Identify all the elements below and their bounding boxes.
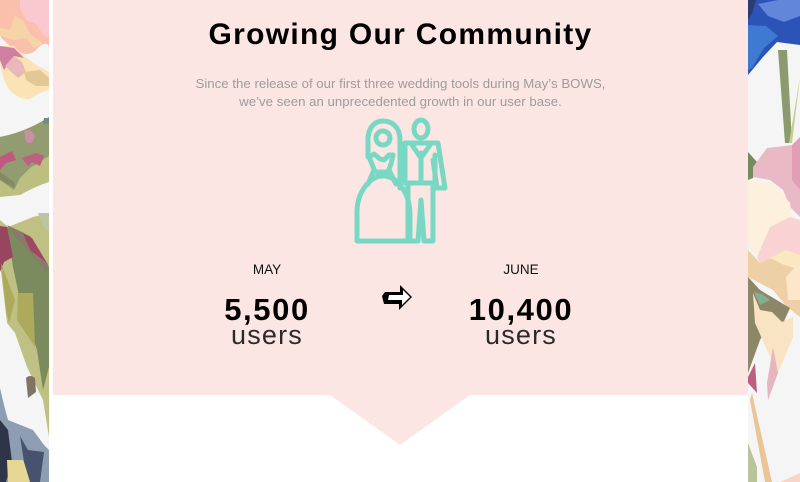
May value: 5,500 [224,292,310,327]
May label: MAY [253,262,281,277]
June unit: users [485,320,557,350]
intro text: we’ve seen an unprecedented growth in our user base. [239,94,562,109]
stat: May [224,262,310,350]
intro text: Since the release of our first three wedding tools during May’s BOWS, [196,76,605,91]
right floral strip [748,0,800,482]
June value: 10,400 [469,292,573,327]
June label: JUNE [503,262,539,277]
May unit: users [231,320,303,350]
arrow [382,285,412,310]
title: Growing Our Community [209,18,592,51]
stat: June [469,262,573,350]
icon: bride and groom [354,118,448,244]
left floral strip [0,0,49,482]
intro text [196,76,605,109]
